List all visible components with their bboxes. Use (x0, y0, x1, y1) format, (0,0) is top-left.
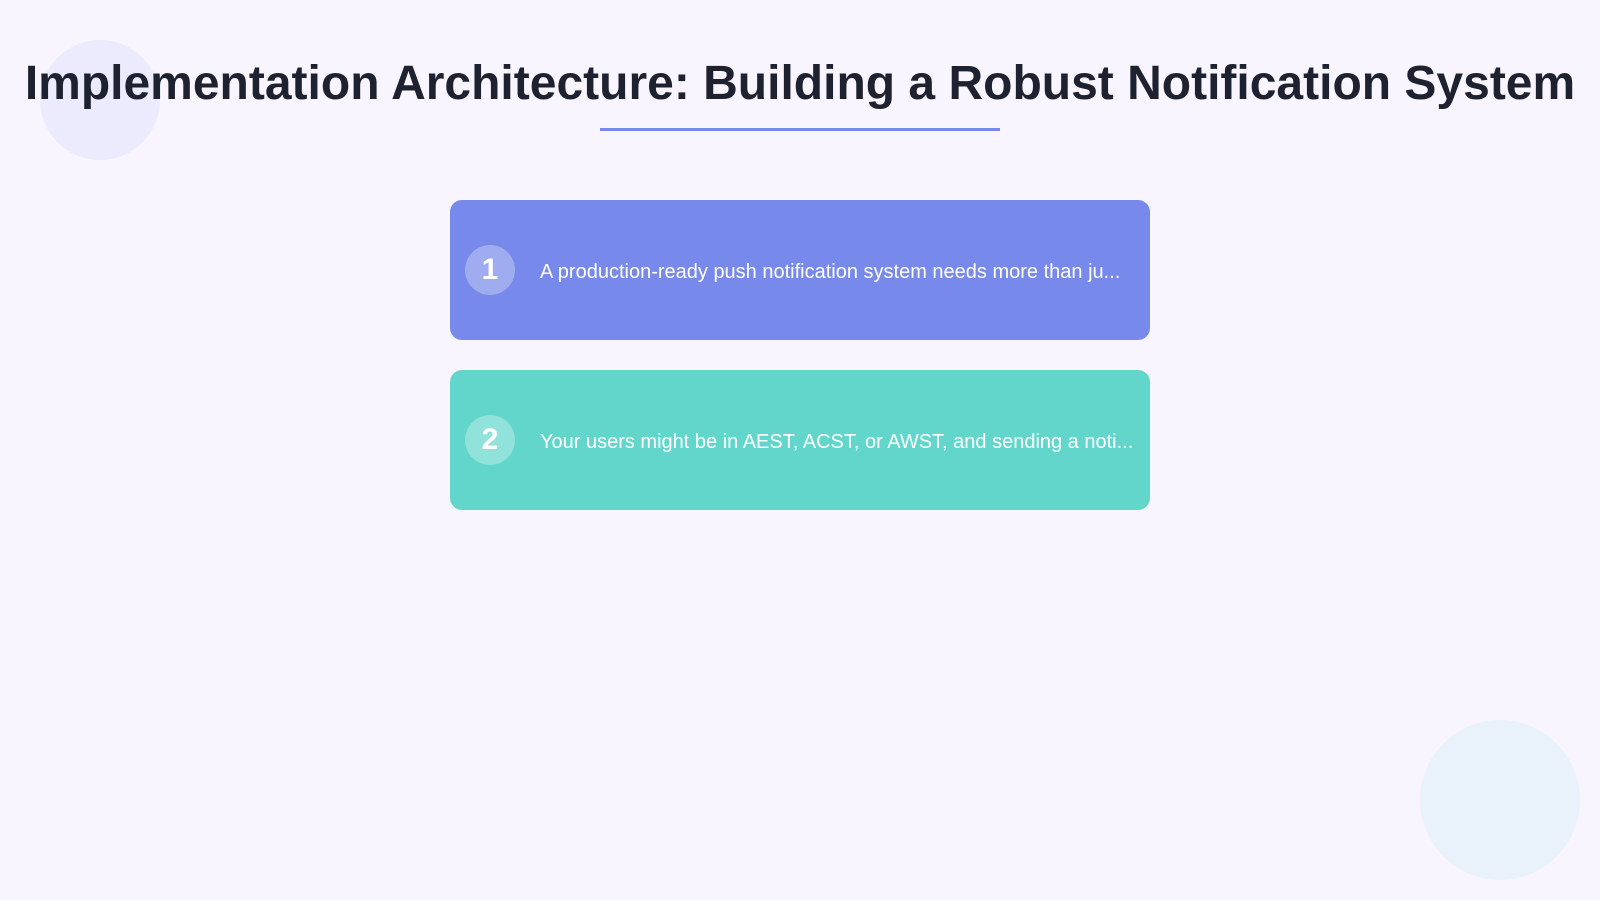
number badge 1 (465, 245, 515, 295)
decorative circle top-left (40, 40, 160, 160)
card 2 (450, 370, 1150, 510)
card 2 text: Your users might be in AEST, ACST, or AWST, and sending a noti... (540, 431, 1133, 453)
title underline (600, 128, 1000, 131)
number badge 2: 2 (482, 423, 498, 456)
card 1 text: A production-ready push notification system needs more than ju... (540, 261, 1120, 283)
decorative circle bottom-right (1420, 720, 1580, 880)
number badge 1: 1 (482, 253, 498, 286)
title: Implementation Architecture: Building a Robust Notification System (25, 57, 1575, 110)
card 1 (450, 200, 1150, 340)
number badge 2 (465, 415, 515, 465)
